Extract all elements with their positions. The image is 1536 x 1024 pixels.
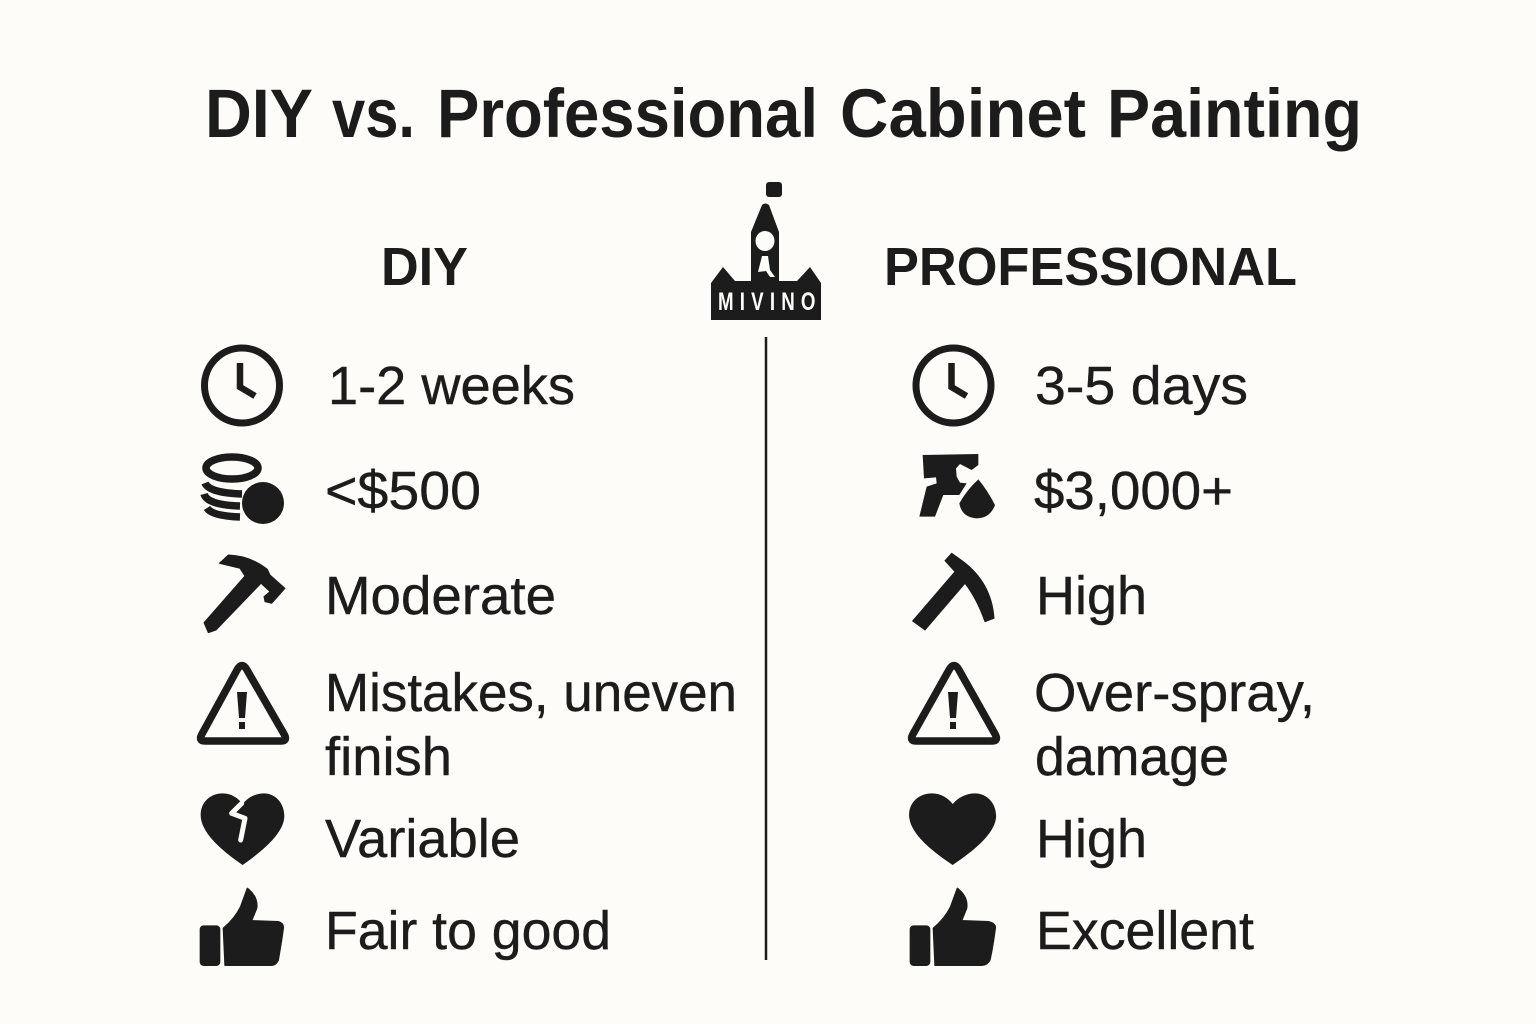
icon: central building [711,182,821,320]
text: durability: Variable [325,809,520,869]
text: risks: Mistakes, uneven [325,663,737,723]
panel: Professional column [909,348,1315,965]
text: result: Excellent [1036,901,1254,961]
icon: warning [912,666,996,741]
title [205,75,1362,152]
panel: DIY column [200,348,737,965]
text: result: Fair to good [325,901,611,961]
icon: clock [204,348,280,423]
icon: paint gun and drop [919,454,995,518]
title: Cabinet [840,75,1086,152]
icon: central building: MIVINO [718,287,816,316]
text: risks [1034,663,1315,787]
icon: broken heart [201,793,284,865]
icon: heart [909,793,996,865]
text: skill: High [1036,566,1147,626]
divider [765,337,767,960]
icon: pick hammer [913,553,994,630]
icon: warning [201,666,285,741]
icon: thumbs up [910,888,995,965]
icon: hammer [204,555,285,633]
title: Painting [1107,75,1362,152]
text: skill: Moderate [325,566,556,626]
text: risks [325,663,737,787]
text: durability: High [1036,809,1147,869]
icon: coins [204,457,284,524]
text: risks: finish [325,727,452,787]
text: time: 3-5 days [1035,356,1248,416]
text: risks: damage [1035,727,1229,787]
title: vs. [332,75,415,152]
title: DIY [205,75,313,152]
text: cost: $3,000+ [1034,461,1233,521]
heading: Professional: PROFESSIONAL [884,237,1297,297]
icon: clock [916,348,991,423]
icon: thumbs up [200,888,283,965]
text: risks: Over-spray, [1034,663,1315,723]
heading: DIY: DIY [381,237,468,297]
text: time: 1-2 weeks [328,356,575,416]
text: cost: <$500 [325,461,481,521]
title: Professional [437,75,818,152]
